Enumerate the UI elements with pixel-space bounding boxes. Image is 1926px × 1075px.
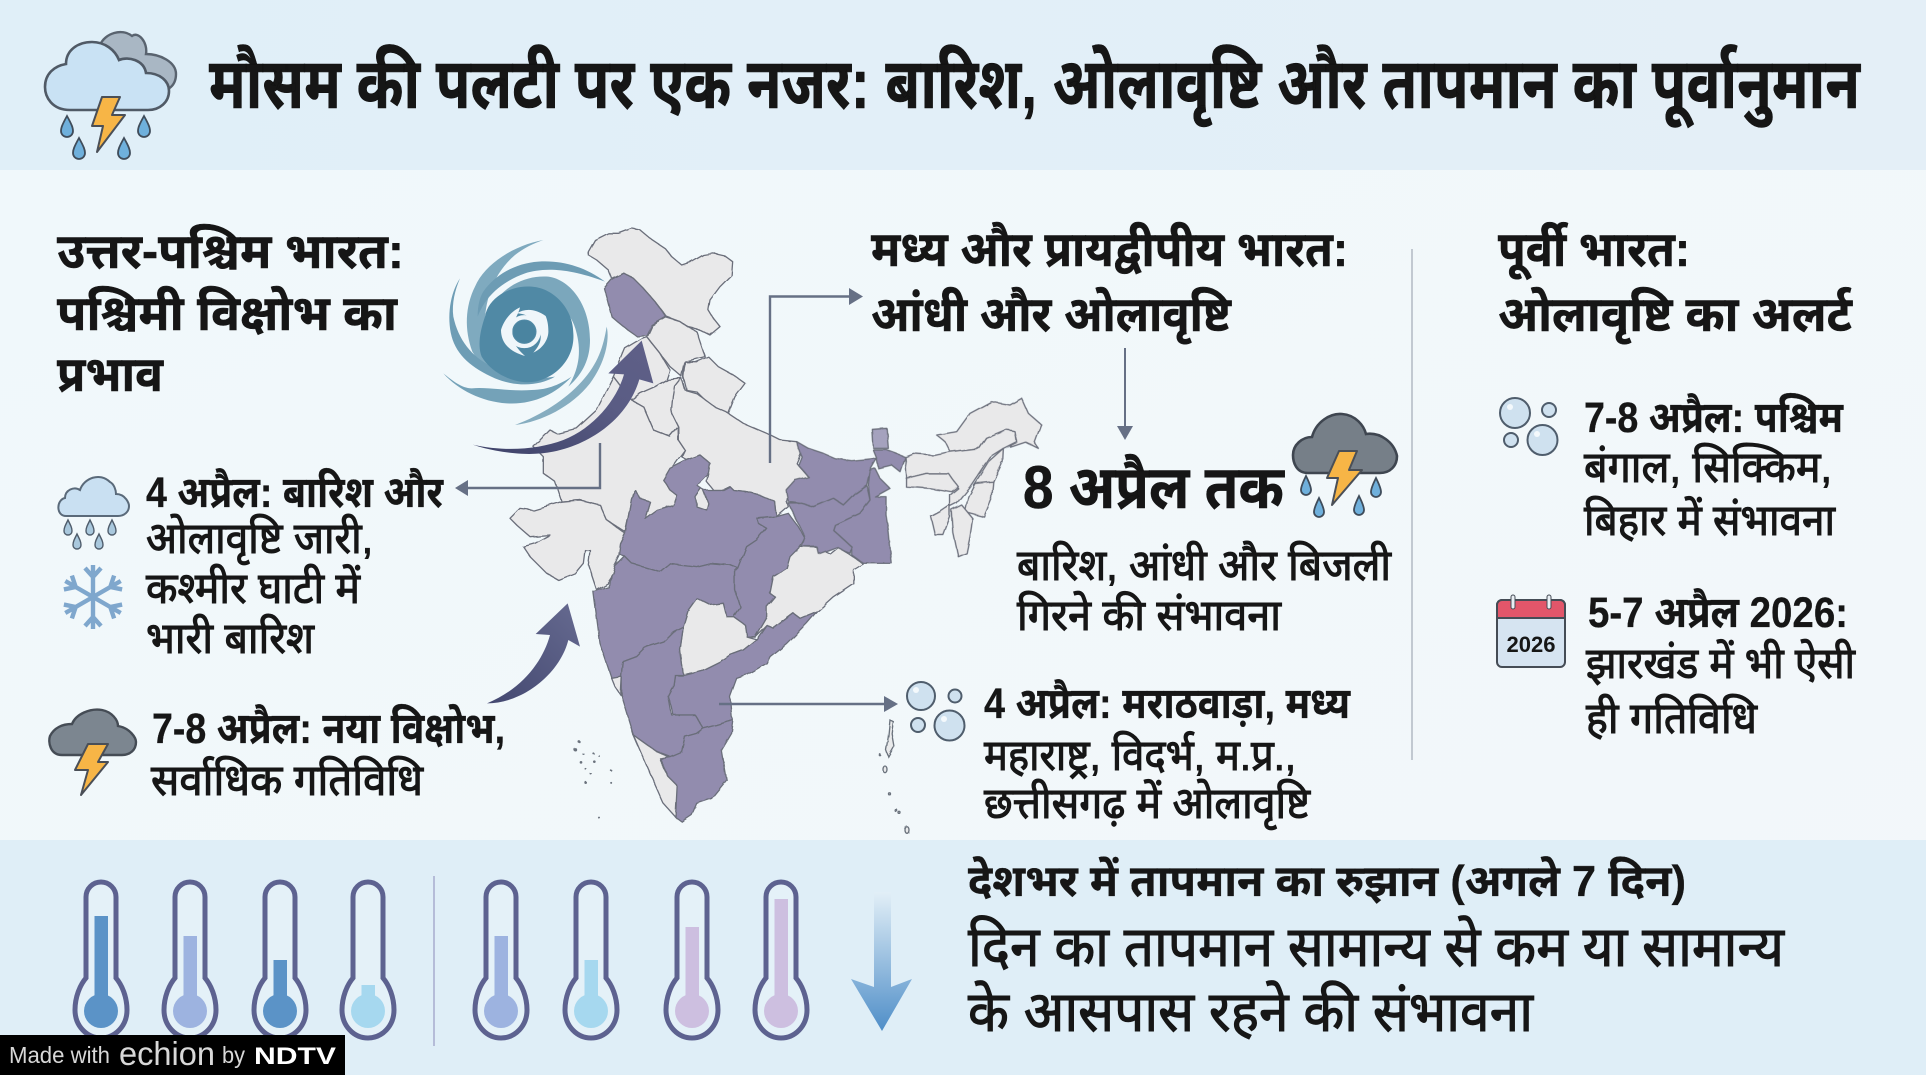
swirl: dark core bbox=[480, 287, 573, 382]
arrow: curved arrow to west coast bbox=[487, 603, 580, 703]
panel: eastern India bbox=[1497, 222, 1856, 743]
region: West Bengal south bbox=[833, 468, 892, 563]
text: 4 April: ओलावृष्टि जारी, bbox=[146, 514, 373, 566]
text: 7-8 April: 7-8 अप्रैल: नया विक्षोभ, bbox=[152, 704, 505, 753]
text: 5-7 April: 5-7 अप्रैल 2026: bbox=[1588, 588, 1848, 637]
icon: hailstones bbox=[1500, 398, 1558, 455]
text: 5-7 April: ही गतिविधि bbox=[1586, 694, 1758, 743]
text: 7-8 April east bbox=[1584, 393, 1844, 545]
heading: east bbox=[1498, 222, 1854, 345]
panel: central and peninsular India bbox=[871, 221, 1397, 831]
icon: storm cloud with rain bbox=[45, 32, 176, 159]
region: Jammu Kashmir Ladakh bbox=[588, 228, 733, 335]
thermometers row bbox=[75, 876, 807, 1046]
text: 7-8 April east: बंगाल, सिक्किम, bbox=[1584, 443, 1832, 492]
text: 5-7 April bbox=[1586, 588, 1856, 743]
swirl arm: outer top bbox=[467, 240, 543, 372]
heading: north-west: प्रभाव bbox=[57, 348, 164, 402]
thermometer 1 bbox=[75, 882, 127, 1038]
divider bbox=[433, 876, 435, 1046]
text: 4 April hail: 4 अप्रैल: मराठवाड़ा, मध्य bbox=[984, 679, 1351, 728]
icon: hailstones bbox=[907, 682, 964, 740]
text: rain thunder lightning: गिरने की संभावना bbox=[1017, 590, 1282, 640]
arrow: connector to hail note bbox=[719, 696, 898, 712]
heading: north-west bbox=[57, 223, 404, 402]
region: Andhra Pradesh bbox=[668, 612, 817, 728]
arrow: connector down to 8 April bbox=[1117, 348, 1133, 440]
column divider bbox=[1411, 249, 1413, 760]
heading: central: मध्य और प्रायद्वीपीय भारत: bbox=[871, 221, 1348, 277]
text: 4 April hail: महाराष्ट्र, विदर्भ, म.प्र., bbox=[984, 731, 1296, 780]
region: Nagaland bbox=[973, 448, 1003, 485]
region: Punjab bbox=[613, 337, 670, 400]
region: Madhya Pradesh bbox=[618, 455, 777, 572]
panel: temperature trend text: दिन का तापमान सामान्य से कम या सामान्य bbox=[968, 915, 1785, 978]
region: Bihar bbox=[786, 442, 877, 507]
thermometer 6 bbox=[565, 882, 617, 1038]
region: Odisha bbox=[755, 547, 863, 637]
region: Goa bbox=[612, 677, 622, 695]
region: Arunachal Pradesh bbox=[937, 398, 1042, 452]
text: 4 April bbox=[146, 468, 444, 663]
region: Uttar Pradesh bbox=[672, 378, 808, 517]
arrow: connector to central heading bbox=[770, 288, 863, 463]
region: Assam bbox=[905, 430, 1017, 507]
region: Tripura bbox=[931, 505, 950, 535]
swirl arm: right tail bbox=[515, 327, 608, 425]
heading: north-west: पश्चिमी विक्षोभ का bbox=[57, 285, 399, 341]
region: Telangana bbox=[680, 598, 757, 675]
thermometer 3 bbox=[254, 882, 306, 1038]
text: 4 April: कश्मीर घाटी में bbox=[146, 564, 361, 613]
region: Rajasthan bbox=[533, 377, 685, 532]
region: Chhattisgarh bbox=[733, 513, 805, 637]
region: Mizoram bbox=[952, 505, 973, 557]
thermometer 5 bbox=[475, 882, 527, 1038]
region: Kashmir highlighted bbox=[604, 273, 666, 336]
panel: temperature trend text: के आसपास रहने की संभावना bbox=[968, 980, 1534, 1043]
header band bbox=[0, 0, 1926, 170]
badge: made with echion by NDTV: echion bbox=[119, 1035, 215, 1072]
heading: east: पूर्वी भारत: bbox=[1498, 222, 1690, 281]
icon: calendar 2026 bbox=[1497, 595, 1565, 667]
panel: temperature trend text bbox=[968, 855, 1785, 1043]
badge: made with echion by NDTV: by bbox=[222, 1042, 245, 1068]
text: 4 April hail: छत्तीसगढ़ में ओलावृष्टि bbox=[984, 779, 1311, 831]
icon: western disturbance swirl bbox=[443, 240, 608, 425]
icon: rain cloud bbox=[58, 477, 129, 549]
text: 7-8 April east: बिहार में संभावना bbox=[1584, 496, 1836, 545]
badge: made with echion by NDTV bbox=[0, 1035, 345, 1075]
swirl arm: left bbox=[449, 278, 555, 384]
islands: Lakshadweep bbox=[573, 740, 612, 819]
region: Uttarakhand bbox=[683, 357, 745, 413]
region: Karnataka bbox=[622, 627, 703, 757]
text: 7-8 April east: 7-8 अप्रैल: पश्चिम bbox=[1584, 393, 1844, 442]
region: Jharkhand bbox=[788, 485, 870, 553]
heading: east: ओलावृष्टि का अलर्ट bbox=[1498, 286, 1854, 345]
arrow: curved arrow to north bbox=[473, 341, 653, 454]
region: Sikkim bbox=[872, 428, 888, 448]
callout: until 8 April: 8 अप्रैल तक bbox=[1023, 454, 1285, 521]
panel: temperature trend text: देशभर में तापमान का रुझान (अगले 7 दिन) bbox=[968, 855, 1686, 906]
heading: north-west: उत्तर-पश्चिम भारत: bbox=[57, 223, 404, 279]
region: Himachal bbox=[647, 317, 705, 377]
region: Maharashtra bbox=[593, 555, 740, 678]
region: Jhansi enclave bbox=[695, 488, 708, 510]
region: Meghalaya bbox=[906, 473, 958, 492]
badge: made with echion by NDTV: Made with bbox=[9, 1042, 110, 1068]
swirl: white eye bbox=[501, 307, 548, 356]
region: Kerala bbox=[633, 735, 677, 818]
islands: Andaman and Nicobar bbox=[879, 720, 909, 833]
region: Gujarat bbox=[510, 500, 625, 590]
icon: storm cloud with rain bbox=[1293, 414, 1397, 517]
region: Haryana Delhi bbox=[632, 378, 682, 437]
map of India bbox=[510, 228, 1042, 833]
text: 5-7 April: झारखंड में भी ऐसी bbox=[1586, 638, 1856, 688]
text: 4 April: भारी बारिश bbox=[146, 614, 315, 663]
swirl arm: right ring bbox=[492, 277, 590, 387]
icon: dark storm cloud bbox=[49, 710, 136, 795]
swirl arm: bottom bbox=[443, 373, 572, 404]
heading: central: आंधी और ओलावृष्टि bbox=[871, 286, 1232, 345]
thermometer 4 bbox=[342, 882, 394, 1038]
heading: central bbox=[871, 221, 1348, 345]
text: 4 April: 4 अप्रैल: बारिश और bbox=[146, 468, 444, 517]
icon: calendar 2026: 2026 bbox=[1507, 632, 1555, 657]
bottom band background bbox=[0, 840, 1926, 1075]
arrow: connector to 4 April note bbox=[455, 443, 600, 496]
thermometer 2 bbox=[164, 882, 216, 1038]
text: rain thunder lightning: बारिश, आंधी और बिजली bbox=[1017, 541, 1392, 590]
region: West Bengal north bbox=[873, 450, 905, 472]
swirl arm: top bbox=[478, 261, 605, 317]
text: rain thunder lightning bbox=[1017, 541, 1392, 640]
thermometer 8 bbox=[755, 882, 807, 1038]
arrow: temperature down bbox=[851, 892, 912, 1031]
region: Tamil Nadu bbox=[660, 720, 733, 822]
text: 4 April hail bbox=[984, 679, 1351, 831]
icon: snowflake bbox=[61, 565, 125, 629]
thermometer 7 bbox=[666, 882, 718, 1038]
panel: north-west India bbox=[49, 223, 505, 805]
text: 7-8 April bbox=[151, 704, 505, 805]
badge: made with echion by NDTV: NDTV bbox=[254, 1043, 336, 1070]
region: eastern and north-eastern states bbox=[786, 398, 1042, 563]
region: Manipur bbox=[965, 482, 993, 517]
text: 7-8 April: सर्वाधिक गतिविधि bbox=[151, 756, 425, 805]
